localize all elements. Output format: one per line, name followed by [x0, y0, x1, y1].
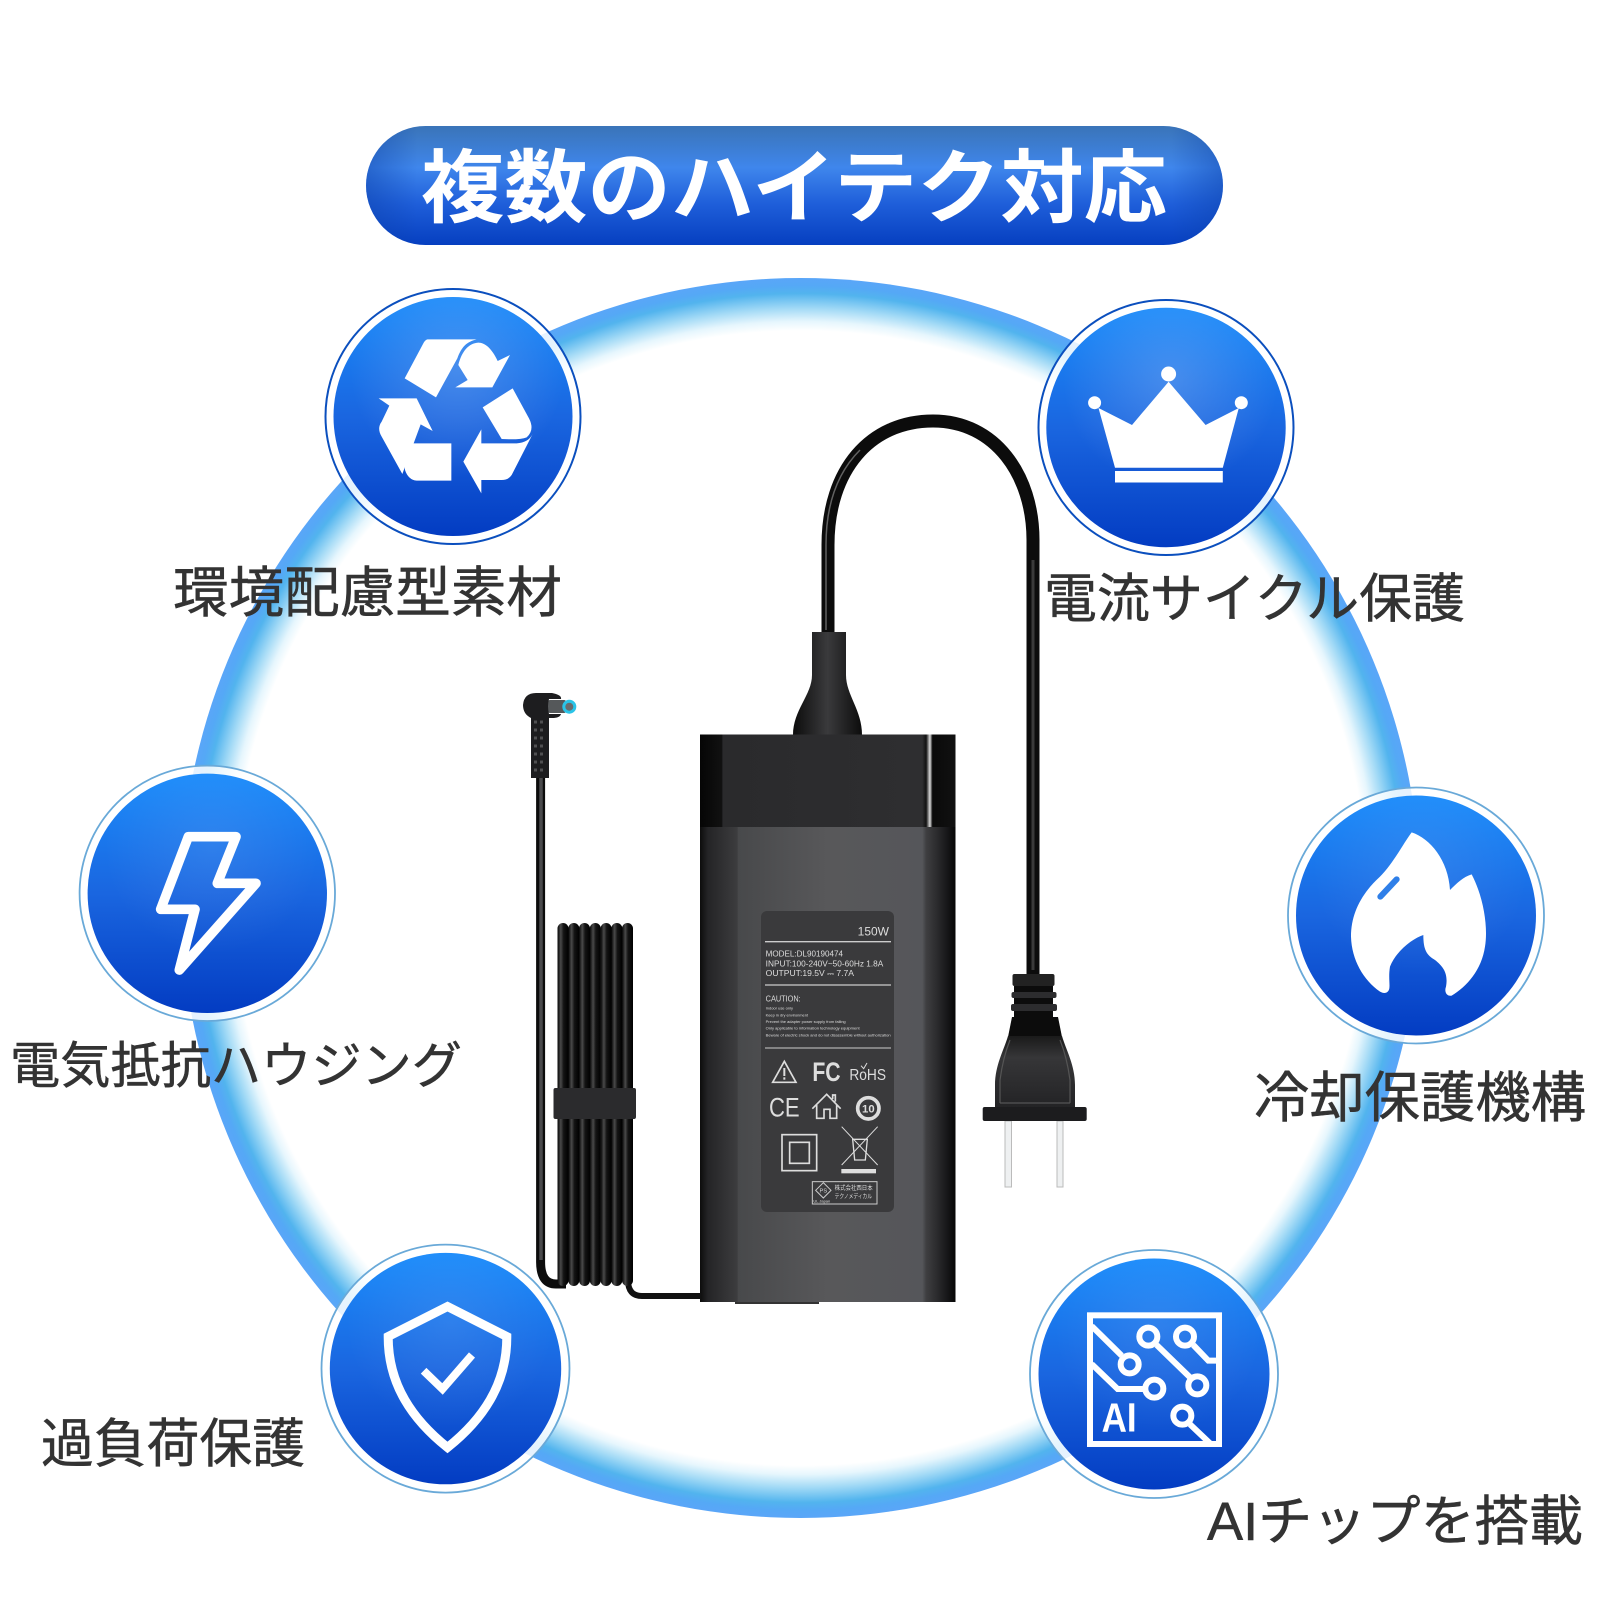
- upper cap: [700, 734, 956, 827]
- model text: [766, 950, 884, 978]
- badge: AI chip: [1030, 1250, 1278, 1498]
- badge: current cycle: [1038, 300, 1294, 555]
- caution text: Keep in dry environment: [766, 1013, 808, 1017]
- badge: cooling: [1288, 788, 1544, 1044]
- prongs: [1005, 1121, 1063, 1187]
- mark: FC: FC: [812, 1057, 841, 1087]
- icon: warning triangle: [773, 1061, 796, 1082]
- mark: PSE box: PS: [820, 1188, 827, 1194]
- model text: INPUT:100-240V~50-60Hz 1.8A: [766, 959, 884, 968]
- DC connector: [523, 693, 575, 1284]
- specification label: [761, 911, 894, 1212]
- mark: PSE box: UL Japan: [813, 1198, 830, 1203]
- caution text: Only applicable to information technology equipment: [766, 1027, 860, 1031]
- badge: overload protection: [322, 1245, 570, 1493]
- icon: crown: [1088, 366, 1248, 482]
- mark: ten year: [858, 1098, 879, 1119]
- label: resistance housing: 電気抵抗ハウジング: [10, 1038, 462, 1094]
- badge: eco material: [326, 289, 580, 544]
- icon: AI circuit board: AI: [1102, 1395, 1137, 1441]
- mark: CE: CE: [769, 1093, 800, 1123]
- icon: recycle: [379, 339, 533, 493]
- icon: house: [812, 1094, 841, 1118]
- power cord: [826, 421, 1033, 980]
- caution text: Beware of electric shock and do not disassemble without authorization: [766, 1033, 891, 1037]
- icon: flame: [1351, 832, 1486, 996]
- mark: ten year: 10: [862, 1103, 875, 1115]
- title text: 複数のハイテク対応: [421, 144, 1167, 233]
- strain relief: [793, 632, 862, 735]
- icon: lightning bolt: [161, 837, 256, 970]
- rating text: 150W: [858, 924, 890, 938]
- mark: PSE box: 株式会社西日本: [835, 1184, 873, 1192]
- caution text: [766, 995, 891, 1037]
- mark: RoHS: RoHS: [849, 1067, 886, 1084]
- caution text: Indoor use only: [766, 1007, 793, 1011]
- cable strap: [554, 1088, 636, 1119]
- icon: shield with check: [388, 1306, 507, 1448]
- badge: resistance housing: [80, 766, 335, 1021]
- icon: double insulation: [782, 1135, 817, 1171]
- title pill: [366, 126, 1223, 245]
- mark: PSE box: [812, 1182, 877, 1204]
- label: overload protection: 過負荷保護: [41, 1415, 305, 1474]
- icon: crossed bin: [841, 1127, 878, 1173]
- icon: AI circuit board: [1090, 1315, 1219, 1444]
- AC plug: [983, 974, 1087, 1187]
- model text: MODEL:DL90190474: [766, 950, 844, 959]
- model text: OUTPUT:19.5V ⎓ 7.7A: [766, 969, 855, 978]
- caution text: Prevent the adapter power supply from falling: [766, 1020, 846, 1024]
- lower housing: [700, 827, 956, 1302]
- label: AI chip: AIチップを搭載: [1207, 1492, 1583, 1552]
- caution text: CAUTION:: [766, 995, 801, 1004]
- label: current cycle protection: 電流サイクル保護: [1044, 570, 1465, 629]
- adapter body: [700, 734, 956, 1304]
- label: cooling mechanism: 冷却保護機構: [1254, 1067, 1586, 1129]
- label: eco material: 環境配慮型素材: [173, 562, 562, 624]
- coiled cable: [554, 923, 702, 1296]
- mark: PSE box: テクノメディカル: [835, 1192, 872, 1200]
- background ring: [180, 278, 1420, 1518]
